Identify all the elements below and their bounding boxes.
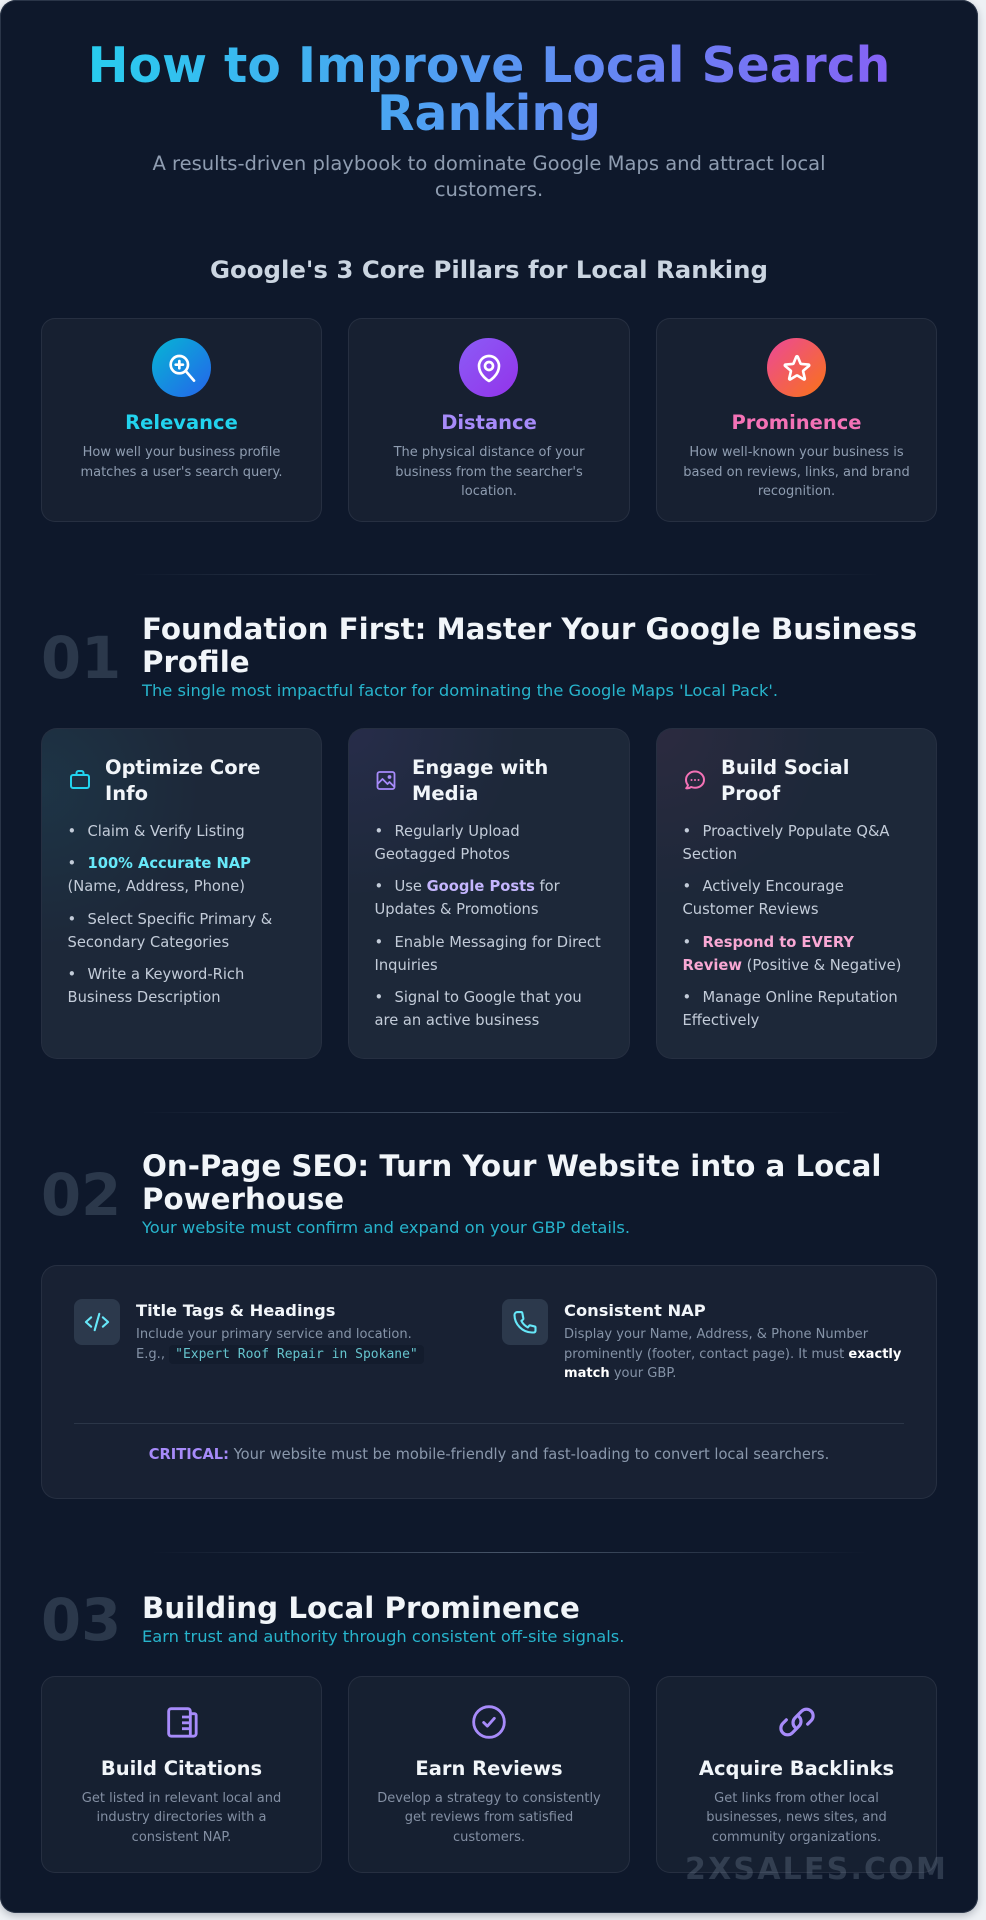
- item description: Include your primary service and location.: [136, 1327, 412, 1342]
- card title: Earn Reviews: [415, 1757, 563, 1780]
- description: recognition.: [758, 484, 835, 499]
- label: Prominence: [731, 411, 862, 434]
- description: [683, 445, 910, 499]
- checklist: •: [374, 989, 383, 1006]
- description: [394, 445, 584, 499]
- item description: E.g., "Expert Roof Repair in Spokane": [136, 1347, 418, 1362]
- checklist: Regularly Upload: [394, 822, 520, 840]
- icon: link: [779, 1708, 815, 1736]
- heading: section 2: Powerhouse: [142, 1182, 344, 1216]
- checklist: Effectively: [682, 1012, 759, 1029]
- checklist: •: [682, 934, 691, 951]
- label: Distance: [441, 411, 537, 434]
- title: Ranking: [377, 85, 601, 142]
- icon: phone: [502, 1299, 548, 1345]
- checklist: Business Description: [68, 989, 221, 1006]
- description: The physical distance of your: [394, 445, 584, 460]
- heading: section 3: Building Local Prominence: [142, 1591, 580, 1625]
- item title: Consistent NAP: [564, 1301, 706, 1320]
- checklist: Manage Online Reputation: [702, 989, 898, 1006]
- card title: Engage with: [412, 756, 548, 779]
- section 2 subtitle: Your website must confirm and expand on your GBP details.: [142, 1218, 630, 1237]
- checklist: Respond to EVERY: [702, 934, 854, 951]
- icon: check circle: [472, 1705, 506, 1739]
- panel: earn reviews: [348, 1676, 630, 1873]
- panel: distance: [348, 318, 630, 522]
- checklist: •: [374, 878, 383, 895]
- icon: chat bubble: [685, 770, 705, 790]
- title: [40, 42, 938, 146]
- checklist: Proactively Populate Q&A: [702, 822, 889, 840]
- checklist: Actively Encourage: [702, 878, 844, 895]
- checklist: •: [374, 822, 383, 840]
- description: [82, 1790, 281, 1845]
- checklist: Signal to Google that you: [394, 989, 582, 1006]
- checklist: [374, 822, 601, 1029]
- checklist: Customer Reviews: [682, 901, 819, 918]
- checklist: •: [682, 822, 691, 840]
- checklist: Claim & Verify Listing: [88, 822, 245, 840]
- card title: [105, 756, 260, 805]
- icon: map pin: [459, 338, 518, 397]
- description: [80, 445, 283, 480]
- panel: relevance: [41, 318, 322, 522]
- checklist: Secondary Categories: [68, 934, 229, 951]
- subtitle: customers.: [435, 178, 543, 201]
- description: [706, 1790, 887, 1845]
- card title: [412, 756, 548, 805]
- description: businesses, news sites, and: [706, 1810, 887, 1825]
- description: consistent NAP.: [132, 1830, 231, 1845]
- checklist: Enable Messaging for Direct: [394, 934, 601, 951]
- item title: Title Tags & Headings: [136, 1301, 335, 1320]
- panel: prominence: [656, 318, 937, 522]
- description: location.: [461, 484, 517, 499]
- checklist: Use Google Posts for: [394, 878, 560, 895]
- checklist: •: [68, 822, 76, 840]
- card title: Acquire Backlinks: [699, 1757, 894, 1780]
- checklist: •: [68, 966, 76, 983]
- checklist: Review (Positive & Negative): [682, 957, 901, 974]
- card title: Build Social: [721, 756, 849, 779]
- icon: code: [74, 1299, 120, 1345]
- checklist: (Name, Address, Phone): [68, 878, 245, 895]
- description: get reviews from satisfied: [405, 1810, 573, 1825]
- subtitle: A results-driven playbook to dominate Google Maps and attract local: [152, 152, 826, 175]
- description: based on reviews, links, and brand: [683, 465, 910, 480]
- icon: star: [767, 338, 826, 397]
- description: [377, 1790, 601, 1845]
- title: How to Improve Local Search: [88, 37, 890, 94]
- panel: acquire backlinks: [656, 1676, 937, 1873]
- heading: core pillars: Google's 3 Core Pillars for Local Ranking: [210, 255, 768, 284]
- checklist: •: [68, 911, 76, 928]
- card title: [721, 756, 849, 805]
- section 1 subtitle: The single most impactful factor for dominating the Google Maps 'Local Pack'.: [142, 681, 778, 700]
- card title: Media: [412, 782, 478, 805]
- checklist: Section: [682, 846, 737, 862]
- description: matches a user's search query.: [80, 465, 283, 480]
- heading: section 2: [142, 1149, 881, 1216]
- watermark: 2XSALES.COM: [685, 1852, 948, 1887]
- checklist: are an active business: [374, 1012, 539, 1029]
- item description: [564, 1327, 902, 1381]
- checklist: [68, 822, 272, 1006]
- heading: section 1: Foundation First: Master Your Google Business: [142, 612, 917, 646]
- item description: match your GBP.: [564, 1366, 676, 1381]
- description: Get links from other local: [714, 1790, 879, 1806]
- section number 01: 01: [41, 625, 121, 692]
- checklist: 100% Accurate NAP: [88, 855, 251, 872]
- checklist: Updates & Promotions: [374, 901, 539, 918]
- card title: Info: [105, 782, 148, 805]
- panel: optimize core info: [41, 728, 322, 1059]
- checklist: [682, 822, 901, 1029]
- heading: section 1: [142, 612, 917, 679]
- description: customers.: [453, 1830, 525, 1845]
- panel: build social proof: [656, 728, 937, 1059]
- checklist: Write a Keyword-Rich: [88, 966, 244, 983]
- subtitle: [152, 152, 826, 201]
- description: Develop a strategy to consistently: [377, 1790, 601, 1806]
- card title: Proof: [721, 782, 780, 805]
- description: Get listed in relevant local and: [82, 1790, 281, 1806]
- critical note: CRITICAL: Your website must be mobile-friendly and fast-loading to convert local searchers.: [149, 1446, 829, 1463]
- checklist: •: [682, 989, 691, 1006]
- checklist: •: [682, 878, 691, 895]
- heading: section 2: On-Page SEO: Turn Your Website into a Local: [142, 1149, 881, 1183]
- section number 03: 03: [41, 1587, 121, 1654]
- description: industry directories with a: [96, 1810, 267, 1825]
- item description: [136, 1327, 418, 1362]
- icon: search: [152, 338, 211, 397]
- heading: section 1: Profile: [142, 645, 250, 679]
- description: business from the searcher's: [395, 465, 583, 480]
- section number 02: 02: [41, 1162, 121, 1229]
- checklist: Select Specific Primary &: [88, 911, 272, 928]
- checklist: •: [374, 934, 383, 951]
- checklist: •: [68, 855, 76, 872]
- checklist: Inquiries: [374, 957, 438, 974]
- item description: prominently (footer, contact page). It must exactly: [564, 1347, 901, 1362]
- item description: Display your Name, Address, & Phone Number: [564, 1327, 868, 1342]
- description: community organizations.: [712, 1830, 881, 1845]
- icon: directory book: [167, 1707, 198, 1738]
- panel: build citations: [41, 1676, 322, 1873]
- checklist: Geotagged Photos: [374, 846, 510, 862]
- description: How well your business profile: [83, 445, 280, 460]
- description: How well-known your business is: [689, 445, 904, 460]
- icon: image: [376, 771, 396, 790]
- card title: Optimize Core: [105, 756, 260, 779]
- card title: Build Citations: [101, 1757, 262, 1780]
- label: Relevance: [125, 411, 238, 434]
- panel: engage with media: [348, 728, 630, 1059]
- section 3 subtitle: Earn trust and authority through consistent off-site signals.: [142, 1627, 624, 1646]
- icon: briefcase: [70, 770, 90, 789]
- panel: on-page seo: [41, 1265, 937, 1499]
